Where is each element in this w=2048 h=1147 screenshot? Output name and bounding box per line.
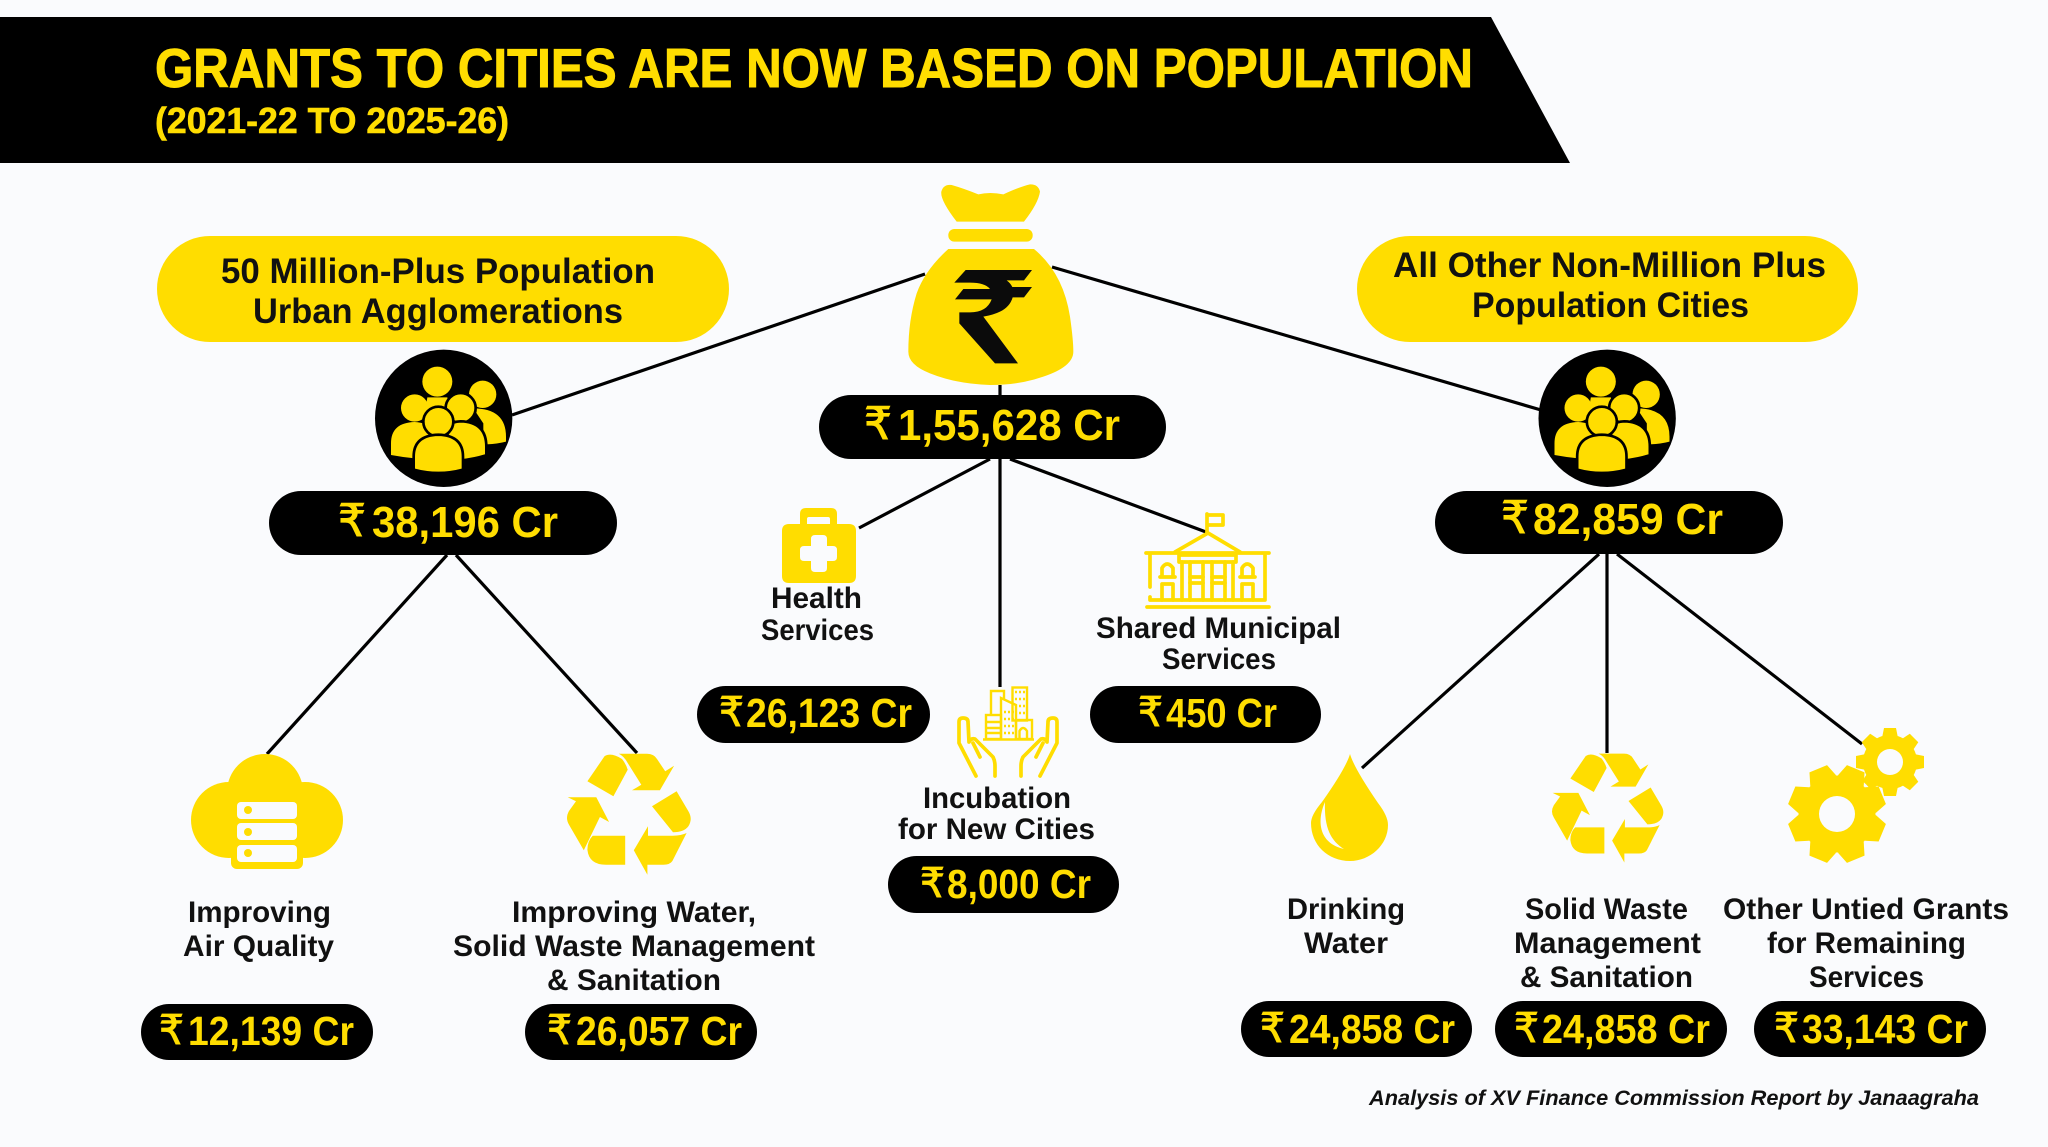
label: incubation (898, 782, 1095, 846)
amount pill: 12,139: ₹ (159, 1007, 184, 1053)
source note: Analysis of XV Finance Commission Report by Janaagraha (1368, 1087, 1979, 1110)
icon: people group left (375, 350, 512, 487)
label: solid waste management: & Sanitation (1520, 961, 1693, 994)
label: improving air quality (183, 896, 334, 963)
heading pill: non-million: Population Cities (1472, 286, 1749, 325)
icon: money bag (908, 184, 1073, 385)
icon: recycle left (567, 754, 691, 875)
amount pill: 8,000 (888, 856, 1119, 913)
amount pill: 12,139: 12,139 Cr (188, 1008, 354, 1054)
amount pill: solid waste: ₹ (1514, 1005, 1539, 1051)
label: solid waste management (1514, 893, 1701, 994)
label: solid waste management: Management (1514, 927, 1701, 960)
label: health services (761, 582, 874, 647)
amount pill: 38,196: 38,196 Cr (372, 498, 558, 547)
amount pill: 450 (1090, 686, 1321, 743)
label: improving air quality: Air Quality (183, 930, 334, 963)
amount pill: 38,196: ₹ (338, 495, 366, 546)
heading pill: million-plus: 50 Million-Plus Population (221, 252, 655, 291)
total amount pill (819, 395, 1166, 459)
label: improving water (453, 896, 815, 997)
icon: gears (1786, 728, 1924, 865)
icon: health kit (782, 508, 856, 583)
label: health services: Health (771, 582, 862, 615)
label: incubation: Incubation (923, 782, 1071, 815)
label: improving water: Solid Waste Management (453, 930, 815, 963)
label: drinking water: Water (1304, 927, 1388, 960)
amount pill: solid waste (1495, 1001, 1727, 1057)
label: drinking water (1287, 893, 1405, 960)
amount pill: 26,123: 26,123 Cr (746, 690, 912, 736)
amount pill: 450: ₹ (1138, 689, 1163, 735)
amount pill: drinking water: ₹ (1260, 1005, 1285, 1051)
label: improving air quality: Improving (188, 896, 331, 929)
icon: municipal building (1146, 514, 1269, 607)
amount pill: 26,123: ₹ (719, 689, 744, 735)
label: health services: Services (761, 614, 874, 647)
heading pill: non-million: All Other Non-Million Plus (1393, 246, 1826, 285)
icon: recycle right (1552, 754, 1663, 863)
icon: city in hands (959, 688, 1057, 776)
label: other untied grants (1723, 893, 2009, 994)
label: drinking water: Drinking (1287, 893, 1405, 926)
icon: cloud server (191, 754, 343, 869)
label: solid waste management: Solid Waste (1525, 893, 1688, 926)
total amount pill: ₹ (864, 398, 892, 449)
amount pill: 82,859 (1435, 491, 1783, 554)
amount pill: 12,139 (141, 1004, 373, 1060)
icon: people group right (1538, 350, 1676, 487)
amount pill: other grants (1754, 1001, 1986, 1057)
heading pill: million-plus (157, 236, 729, 342)
title: GRANTS TO CITIES ARE NOW BASED ON POPULATION (155, 37, 1473, 99)
label: other untied grants: Other Untied Grants (1723, 893, 2009, 926)
label: other untied grants: for Remaining (1767, 927, 1966, 960)
amount pill: 38,196 (269, 491, 617, 555)
total amount pill: 1,55,628 Cr (898, 401, 1120, 450)
amount pill: 26,057: 26,057 Cr (576, 1008, 742, 1054)
amount pill: 8,000: ₹ (920, 860, 945, 906)
title banner (0, 17, 1570, 163)
amount pill: other grants: 33,143 Cr (1802, 1006, 1968, 1052)
label: shared municipal services: Services (1162, 643, 1276, 676)
label: shared municipal services: Shared Municipal (1096, 612, 1341, 645)
amount pill: 450: 450 Cr (1166, 690, 1277, 736)
amount pill: 8,000: 8,000 Cr (947, 861, 1091, 907)
label: improving water: & Sanitation (547, 964, 721, 997)
amount pill: solid waste: 24,858 Cr (1542, 1006, 1710, 1052)
heading pill: non-million (1357, 236, 1858, 342)
label: shared municipal services (1096, 612, 1341, 676)
amount pill: 82,859: ₹ (1501, 492, 1529, 543)
heading pill: million-plus: Urban Agglomerations (253, 292, 623, 331)
amount pill: drinking water (1241, 1001, 1472, 1057)
amount pill: 26,123 (697, 686, 930, 743)
label: improving water: Improving Water, (512, 896, 756, 929)
icon: water drop (1311, 754, 1388, 861)
label: incubation: for New Cities (898, 813, 1095, 846)
amount pill: 26,057 (525, 1004, 757, 1060)
amount pill: drinking water: 24,858 Cr (1289, 1006, 1455, 1052)
amount pill: other grants: ₹ (1774, 1005, 1799, 1051)
amount pill: 26,057: ₹ (547, 1007, 572, 1053)
amount pill: 82,859: 82,859 Cr (1533, 495, 1723, 544)
label: other untied grants: Services (1809, 961, 1924, 994)
subtitle: (2021-22 TO 2025-26) (155, 100, 509, 141)
connector lines (267, 267, 1862, 768)
